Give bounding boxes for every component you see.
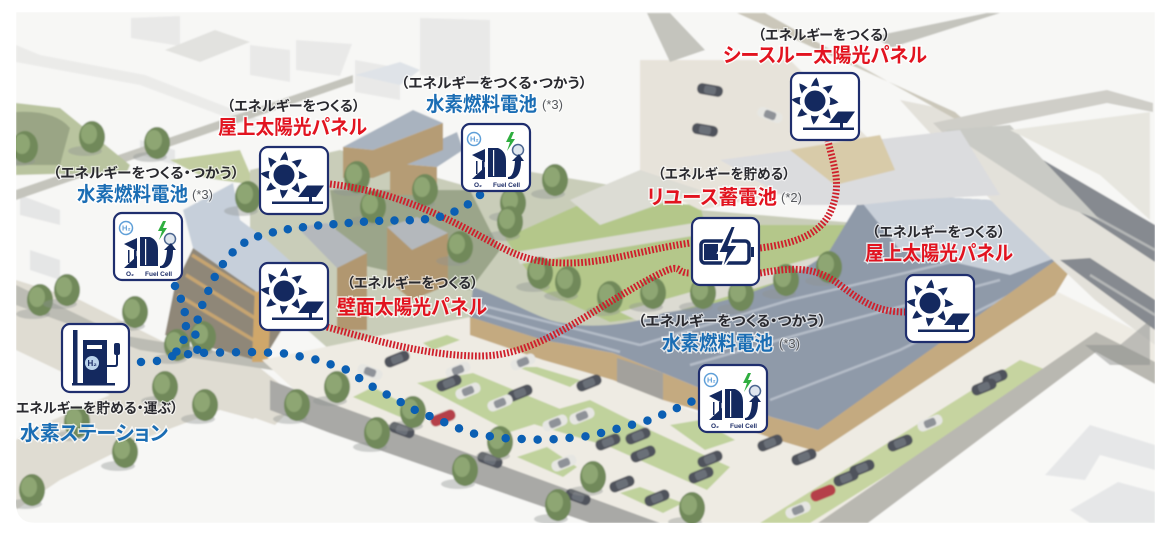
label: reuse battery — [647, 166, 802, 209]
label: see-through solar panel: シースルー太陽光パネル — [723, 44, 927, 67]
label: reuse battery: （エネルギーを貯める） — [658, 166, 790, 182]
label: wall solar — [337, 275, 487, 319]
label: south fuel cell: 水素燃料電池 — [662, 332, 773, 355]
label: east rooftop solar — [865, 224, 1013, 265]
label: reuse battery: (*2) — [781, 190, 802, 205]
red power line: rooftop and see-through panels to battery — [330, 141, 837, 263]
west street and pavements — [16, 280, 300, 510]
label: reuse battery: リユース蓄電池 — [647, 186, 777, 209]
label: west fuel cell: 水素燃料電池 — [77, 183, 188, 206]
label: north fuel cell: (*3) — [542, 97, 563, 112]
label: east rooftop solar: 屋上太陽光パネル — [865, 242, 1013, 265]
icon: fuel cell west: O₂ — [126, 271, 134, 278]
label: see-through solar panel: （エネルギーをつくる） — [758, 27, 890, 43]
icon: fuel cell north: O₂ — [474, 182, 482, 189]
label: south fuel cell: (*3) — [779, 336, 800, 351]
icon: fuel cell west: H₂ — [122, 224, 131, 232]
blue hydrogen line: station to west fuel cell — [173, 286, 186, 356]
blue hydrogen line: station to north fuel cell — [195, 195, 480, 353]
icon: fuel cell north — [462, 124, 530, 191]
label: north fuel cell — [401, 75, 587, 116]
mid ground — [250, 150, 880, 350]
trees — [16, 284, 53, 319]
icon: fuel cell south: O₂ — [711, 423, 719, 430]
label: east rooftop solar: （エネルギーをつくる） — [872, 224, 1005, 240]
icon: fuel cell west — [114, 213, 182, 280]
plaza and parking — [262, 292, 1155, 523]
east rail and white lot — [900, 100, 1155, 345]
icon: see-through solar panel — [791, 73, 859, 140]
icon: fuel cell north: Fuel Cell — [493, 182, 520, 189]
label: see-through solar panel — [723, 27, 927, 67]
label: south fuel cell: （エネルギーをつくる・つかう） — [638, 313, 826, 329]
label: wall solar: 壁面太陽光パネル — [337, 296, 487, 319]
icon: wall solar panel — [260, 263, 328, 330]
label: north fuel cell: （エネルギーをつくる・つかう） — [401, 75, 587, 91]
curved building — [164, 248, 282, 360]
icon: fuel cell south: H₂ — [707, 376, 716, 384]
icon: fuel cell south: Fuel Cell — [730, 423, 757, 430]
label: wall solar: （エネルギーをつくる） — [347, 275, 478, 291]
icon: rooftop solar panel east — [906, 275, 974, 342]
label: west fuel cell: （エネルギーをつくる・つかう） — [53, 165, 239, 181]
label: west rooftop solar: （エネルギーをつくる） — [227, 98, 360, 114]
label: hydrogen station: エネルギーを貯める・運ぶ） — [16, 400, 178, 416]
top left neighbourhood buildings — [131, 16, 490, 100]
station canopies — [647, 13, 1000, 62]
label: hydrogen station — [16, 400, 178, 445]
red power line: wall and station roof panels to battery — [327, 268, 906, 356]
icon: reuse battery — [692, 218, 759, 285]
icon: hydrogen station: H₂ — [88, 359, 97, 368]
blue hydrogen line: station to south fuel cell — [141, 352, 695, 440]
icon: fuel cell south — [699, 365, 767, 432]
label: south fuel cell — [638, 313, 826, 355]
icon: fuel cell north: H₂ — [470, 134, 479, 144]
station roof — [470, 195, 1063, 430]
mixed-use buildings — [343, 110, 463, 167]
icon: rooftop solar panel west — [260, 147, 328, 214]
label: west fuel cell: (*3) — [192, 187, 213, 202]
cars — [982, 368, 1008, 384]
label: west fuel cell — [53, 165, 239, 206]
label: north fuel cell: 水素燃料電池 — [426, 93, 537, 116]
label: west rooftop solar: 屋上太陽光パネル — [218, 116, 367, 139]
icon: hydrogen station — [62, 324, 129, 392]
label: hydrogen station: 水素ステーション — [20, 422, 168, 445]
label: west rooftop solar — [218, 98, 367, 139]
icon: fuel cell west: Fuel Cell — [145, 271, 172, 278]
